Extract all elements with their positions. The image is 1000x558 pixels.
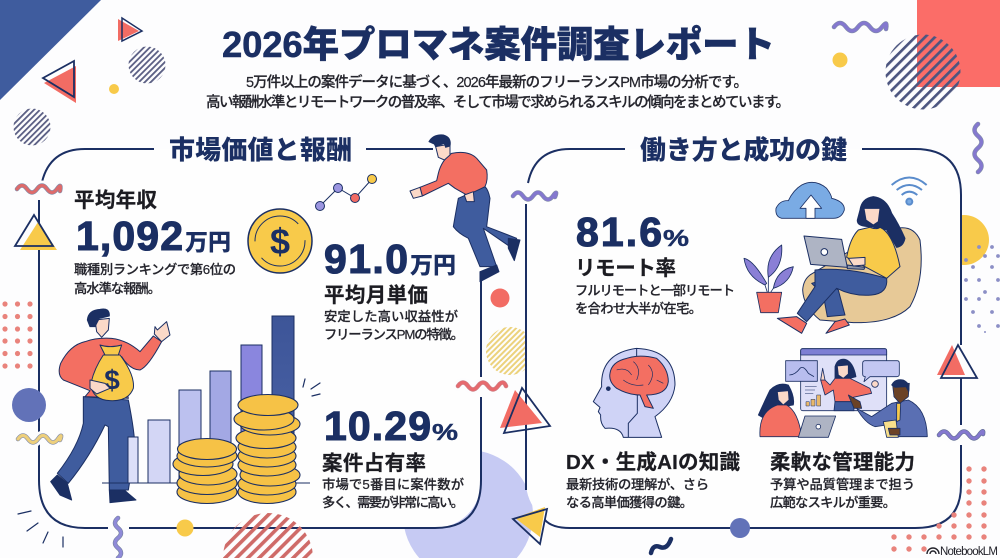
stat: average annual income: 1,092: [76, 213, 183, 259]
icon: cloud upload: [776, 182, 844, 218]
stat: remote rate: [575, 209, 735, 316]
stat: average monthly rate: 万円: [410, 252, 456, 278]
stat: project share: 市場で5番目に案件数が: [322, 476, 464, 492]
block: flexible management: 予算や品質管理まで担う: [770, 476, 915, 492]
stat: average monthly rate: 平均月単価: [324, 284, 428, 307]
heading: work style and keys to success: 働き方と成功の鍵: [640, 135, 847, 165]
illustration: coin stacks: [173, 394, 300, 504]
panel frame: work style and keys to success: [526, 149, 961, 528]
title: 2026年プロマネ案件調査レポート: [222, 24, 775, 65]
stat: average annual income: 職種別ランキングで第6位の: [74, 261, 236, 277]
stat: remote rate: %: [663, 225, 689, 251]
stat: project share: 多く、需要が非常に高い。: [322, 494, 464, 510]
burst ticks: [18, 379, 320, 547]
panel backgrounds: [39, 149, 961, 528]
red dot grid left: [2, 301, 33, 369]
stat: average monthly rate: フリーランスPMの特徴。: [324, 327, 464, 342]
block: flexible management: [770, 451, 915, 510]
intro text: 高い報酬水準とリモートワークの普及率、そして市場で求められるスキルの傾向をまとめています。: [206, 93, 790, 111]
stat: average annual income: 平均年収: [74, 189, 158, 212]
block: flexible management: 広範なスキルが重要。: [770, 494, 896, 510]
icon: wifi: [892, 177, 927, 205]
icon: dollar coin: $: [270, 221, 290, 262]
illustration: man holding money bag: [51, 309, 170, 503]
heading: market value and pay: 市場価値と報酬: [169, 135, 352, 165]
illustration: running man: [410, 135, 520, 282]
NotebookLM watermark: NotebookLM: [940, 546, 998, 558]
intro text: [206, 73, 790, 111]
block: flexible management: 柔軟な管理能力: [770, 451, 915, 474]
stat: project share: 案件占有率: [322, 452, 426, 475]
illustration: woman on beanbag with laptop: [777, 197, 921, 333]
icon: dollar coin: [248, 209, 312, 273]
icon: head with brain: [593, 348, 675, 437]
illustration: man holding money bag: $: [104, 364, 120, 395]
stat: remote rate: リモート率: [575, 257, 676, 280]
illustration: team meeting: [758, 349, 927, 437]
stat: remote rate: を合わせ大半が在宅。: [575, 300, 702, 316]
stat: project share: 10.29: [324, 403, 431, 449]
stat: average monthly rate: 安定した高い収益性が: [324, 308, 458, 324]
stat: remote rate: フルリモートと一部リモート: [575, 283, 735, 298]
bar chart: [102, 316, 310, 483]
intro text: 5万件以上の案件データに基づく、2026年最新のフリーランスPM市場の分析です。: [246, 73, 748, 91]
stat: average annual income: 高水準な報酬。: [74, 280, 161, 296]
stat: average monthly rate: 91.0: [324, 236, 408, 282]
icon: potted plant: [744, 245, 793, 313]
block: DX and generative AI knowledge: DX・生成AIの知識: [566, 450, 740, 474]
stat: average annual income: 万円: [185, 229, 231, 255]
stat: average monthly rate: [324, 236, 464, 342]
purple dot grid right: [964, 245, 1000, 333]
stat: project share: %: [432, 419, 458, 445]
stat: remote rate: 81.6: [576, 209, 662, 255]
block: DX and generative AI knowledge: 最新技術の理解が、さら: [566, 476, 709, 492]
red dot grid lower right: [891, 466, 987, 552]
block: DX and generative AI knowledge: なる高単価獲得の鍵。: [566, 494, 693, 510]
block: DX and generative AI knowledge: [566, 450, 740, 510]
stat: average annual income: [74, 189, 236, 296]
icon: small line chart: [316, 174, 376, 210]
stat: project share: [322, 403, 464, 510]
panel frame: market value and pay: [39, 149, 481, 528]
